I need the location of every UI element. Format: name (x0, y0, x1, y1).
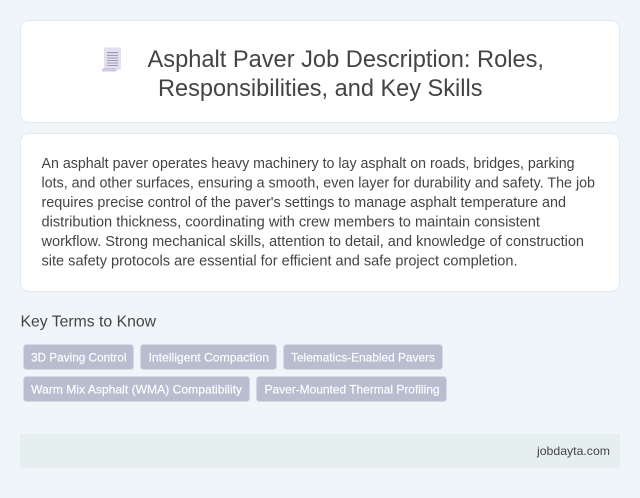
chip: Warm Mix Asphalt (24, 376, 250, 402)
description text: An asphalt paver operates heavy machinery to lay asphalt on roads, bridges, parking (42, 156, 574, 172)
chip: Paver-Mounted Thermal Profiling (256, 376, 446, 402)
description text: distribution thickness, coordinating with crew members to maintain consistent (42, 214, 540, 230)
chip: Paver-Mounted Thermal Profiling: Paver-Mounted Thermal Profiling (264, 382, 440, 396)
footer source text: jobdayta.com (536, 444, 610, 458)
header card (20, 20, 620, 122)
title (148, 46, 544, 102)
description text: workflow. Strong mechanical skills, attention to detail, and knowledge of construction (41, 234, 584, 250)
title: Responsibilities, and Key Skills (158, 75, 482, 102)
chip: 3D Paving Control: 3D Paving Control (31, 350, 126, 364)
icon: document scroll (102, 48, 121, 72)
chip: 3D Paving Control (24, 344, 134, 370)
chip: Telematics-Enabled Pavers: Telematics-Enabled Pavers (291, 350, 435, 364)
chip: Warm Mix Asphalt: Warm Mix Asphalt (WMA) Compatibility (31, 382, 242, 396)
description text: requires precise control of the paver's settings to manage asphalt temperature and (42, 195, 566, 211)
key term chips (24, 344, 446, 402)
chip: Telematics-Enabled Pavers (284, 344, 442, 370)
chip: Intelligent Compaction: Intelligent Compaction (148, 350, 269, 364)
description text (41, 156, 595, 270)
title: Asphalt Paver Job Description: Roles, (148, 46, 544, 73)
chip: Intelligent Compaction (140, 344, 276, 370)
description text: lots, and other surfaces, ensuring a smooth, even layer for durability and safety. The job (42, 176, 595, 192)
description text: site safety protocols are essential for efficient and safe project completion. (42, 254, 518, 270)
footer bar (20, 434, 620, 468)
description card (20, 134, 620, 292)
heading: key terms: Key Terms to Know (20, 314, 156, 330)
